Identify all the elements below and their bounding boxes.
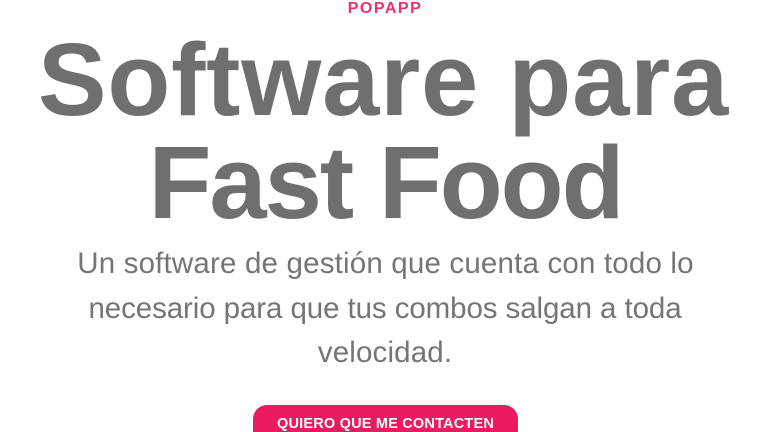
eyebrow label: POPAPP xyxy=(348,0,422,17)
call to action button xyxy=(253,405,518,432)
title xyxy=(38,22,729,240)
title: Fast Food xyxy=(148,125,623,240)
description text xyxy=(77,247,694,369)
call to action button: QUIERO QUE ME CONTACTEN xyxy=(277,416,494,432)
title: Software para xyxy=(38,22,729,137)
description text: Un software de gestión que cuenta con todo lo xyxy=(77,247,694,280)
description text: velocidad. xyxy=(318,336,452,369)
description text: necesario para que tus combos salgan a toda xyxy=(88,292,682,324)
